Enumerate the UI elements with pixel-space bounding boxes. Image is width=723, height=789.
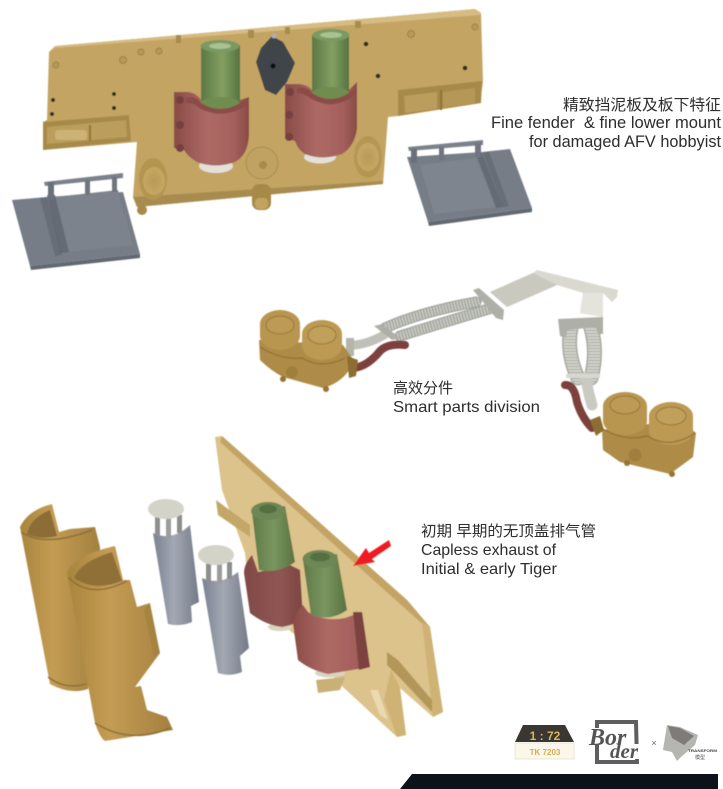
red pipes <box>354 345 592 428</box>
grey inner tube 2 <box>198 545 249 675</box>
cylinder mount: right exhaust <box>285 29 357 164</box>
heading: fender caption: 精致挡泥板及板下特征 <box>563 96 721 114</box>
panel: smart parts division assembly <box>259 270 696 477</box>
logo: Transform <box>663 725 717 761</box>
text block: capless exhaust: 初期 早期的无顶盖排气管 <box>421 523 596 540</box>
small hook <box>137 205 147 215</box>
text block: capless exhaust <box>421 523 596 578</box>
rear plate <box>43 9 483 215</box>
rear cover right <box>67 546 173 741</box>
logo: Border <box>588 722 642 763</box>
heading: fender caption <box>491 96 721 151</box>
corrugated hoses <box>354 302 594 405</box>
dark cover plate <box>256 34 295 95</box>
text block: smart parts division: Smart parts division <box>393 399 540 416</box>
upper duct <box>490 270 618 317</box>
right bolt cap <box>354 136 382 178</box>
logo: scale badge <box>515 725 574 759</box>
logo: Transform: TRANSFORM <box>688 749 717 753</box>
left muffler <box>259 310 358 392</box>
heading: fender caption: Fine fender & fine lower mount <box>491 114 721 132</box>
logo: Border: Bor <box>588 725 627 751</box>
cylinder mount: left exhaust <box>174 40 249 173</box>
text block: smart parts division: 高效分件 <box>393 380 453 397</box>
exhaust set 1 <box>244 502 303 631</box>
panel: exhaust exploded view <box>20 436 443 741</box>
exhaust set 2 <box>293 550 370 678</box>
angled plate <box>215 436 443 737</box>
right rack <box>398 81 482 116</box>
left rack <box>43 115 131 150</box>
left fender <box>12 173 140 270</box>
centre cap <box>246 147 278 179</box>
heading: fender caption: for damaged AFV hobbyist <box>529 133 721 151</box>
right fender <box>407 140 532 226</box>
text block: capless exhaust: Capless exhaust of <box>421 542 557 559</box>
logo: scale badge: 1 : 72 <box>530 729 561 743</box>
multiply mark: × <box>651 738 657 748</box>
logo: Border: der <box>610 739 639 763</box>
hose brackets <box>346 288 603 378</box>
text block: smart parts division <box>393 380 540 416</box>
text block: capless exhaust: Initial & early Tiger <box>421 561 558 578</box>
panel: fender parts <box>12 9 532 270</box>
lower lug <box>252 184 271 210</box>
logo: scale badge: TK 7203 <box>530 748 561 757</box>
grey inner tube 1 <box>148 499 199 625</box>
red arrow <box>353 540 391 566</box>
right muffler <box>590 392 696 477</box>
footer bar <box>400 774 718 789</box>
logo: Transform: 模型 <box>695 754 705 761</box>
left bolt cap <box>139 158 167 200</box>
rear cover left <box>20 504 100 691</box>
